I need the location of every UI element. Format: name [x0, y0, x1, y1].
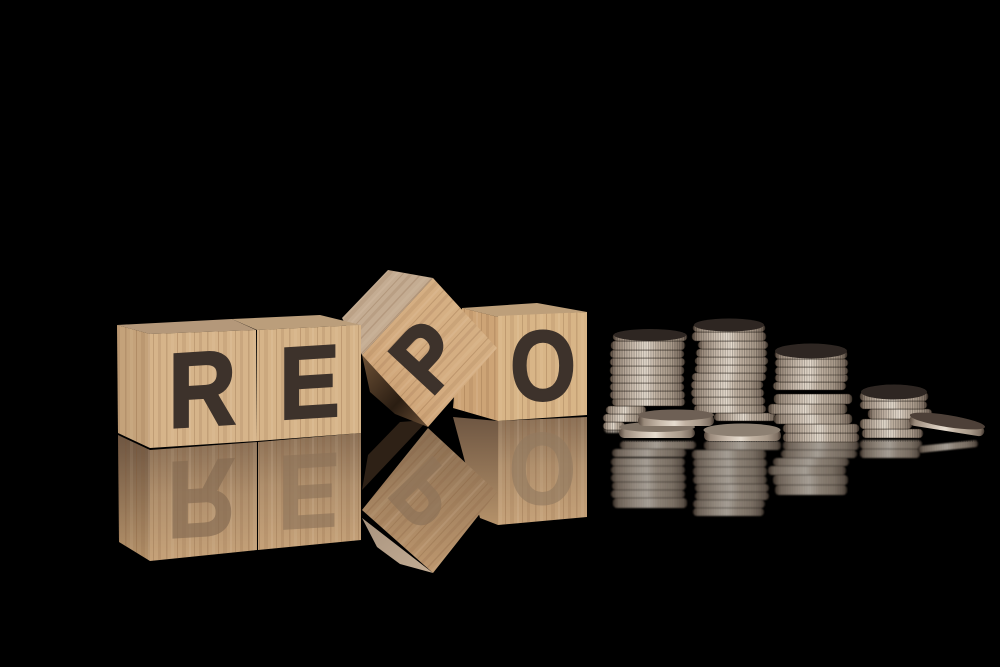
flat coin left, lower — [619, 422, 695, 438]
reflection: block O — [453, 412, 587, 526]
letter P: P — [372, 303, 483, 412]
flat coin left, upper — [638, 410, 714, 426]
coin stack 3 — [768, 350, 859, 442]
block E — [232, 315, 361, 442]
tilted coin right — [908, 409, 986, 437]
light side face — [342, 270, 433, 355]
reflected stack 2 — [692, 441, 781, 516]
letter E: E — [279, 323, 340, 442]
reflection of wooden blocks — [118, 412, 587, 573]
reflected letter E: E — [278, 431, 339, 552]
front face — [362, 278, 497, 427]
dark top faces of stacks — [614, 318, 927, 400]
wooden blocks spelling REPO — [117, 270, 587, 451]
coin stack 2 — [691, 324, 776, 421]
letter O: O — [510, 311, 576, 421]
coin stack 1 — [603, 333, 687, 430]
reflected coin ridges — [600, 425, 990, 520]
reflected stack 4 — [860, 440, 978, 458]
reflection of coin stacks — [600, 425, 990, 520]
reflection: block E — [258, 431, 361, 552]
reflected letter P: P — [371, 440, 479, 547]
reflected letter R: R — [167, 435, 235, 562]
reflected stack 1 — [604, 425, 696, 508]
letter R: R — [168, 328, 236, 451]
reflection: block P — [362, 420, 497, 573]
loose flat coins — [619, 409, 986, 441]
reflected stack 3 — [768, 441, 859, 495]
coin stacks — [600, 318, 990, 442]
coin stack 4 — [860, 392, 932, 438]
reflection: block R — [118, 435, 257, 562]
reflected letter O: O — [509, 412, 576, 526]
flat coin centre — [704, 424, 781, 441]
coin edge ridges — [600, 320, 990, 442]
block O — [453, 303, 587, 421]
block R — [117, 319, 257, 451]
block P — [342, 270, 497, 427]
underside of tilted block — [362, 355, 428, 427]
